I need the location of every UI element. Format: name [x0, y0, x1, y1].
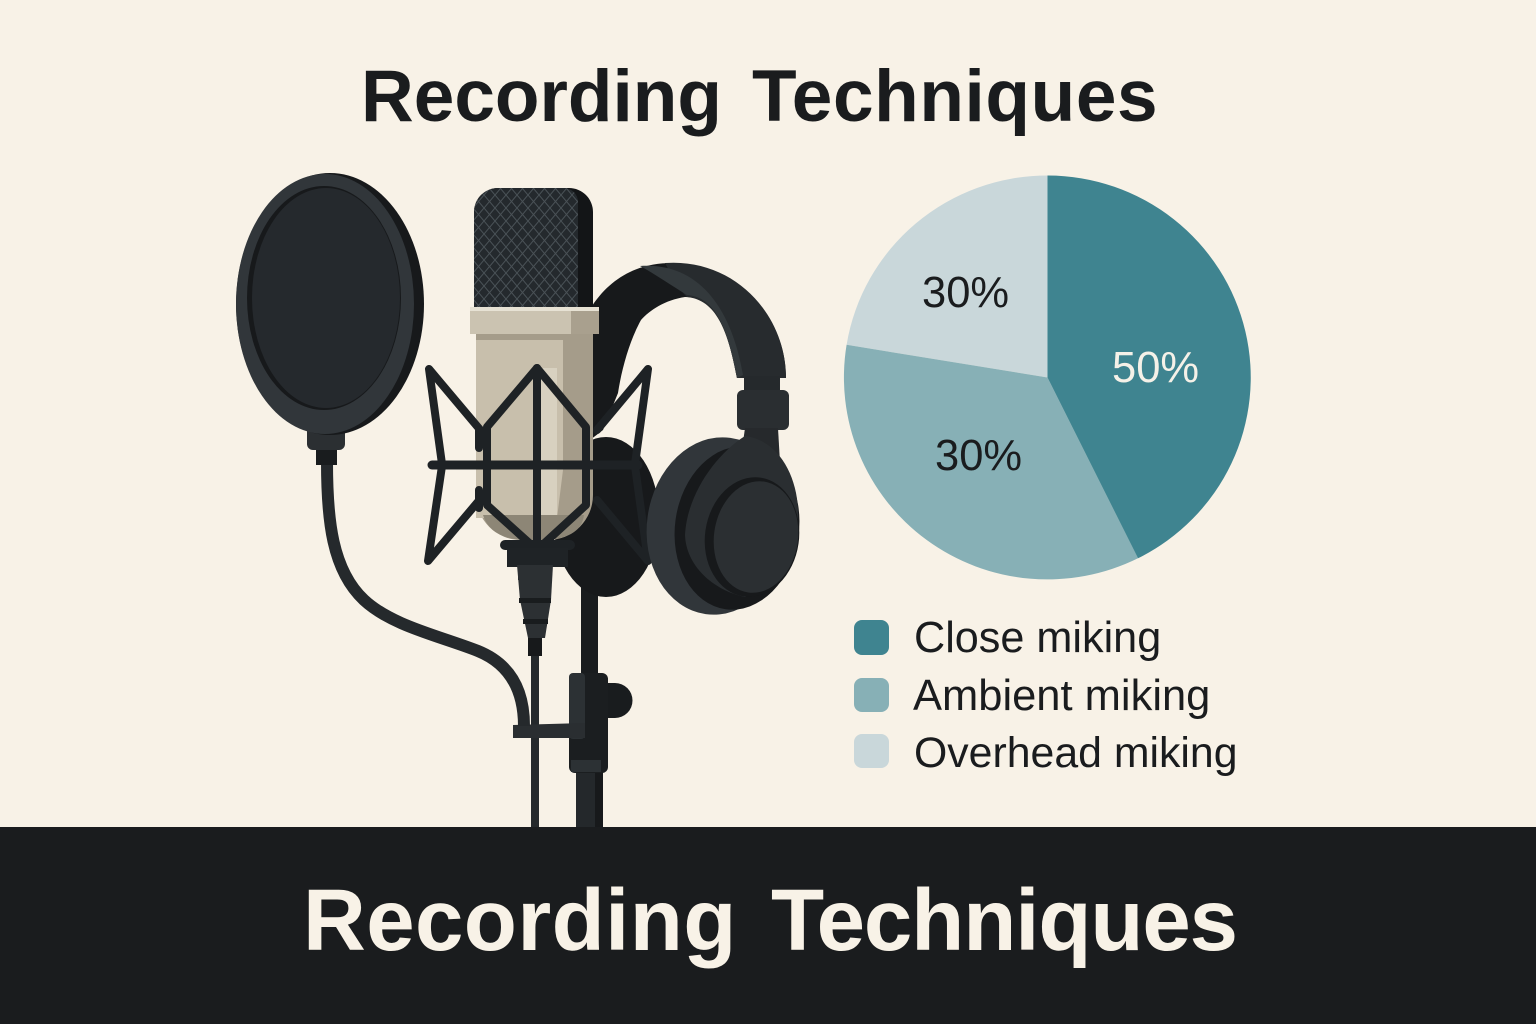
- grille: [474, 188, 593, 307]
- icon: headphone front cup: [635, 376, 810, 624]
- legend: [854, 614, 1238, 777]
- footer title: Techniques: [771, 872, 1237, 969]
- icon: mic connector: [507, 548, 568, 656]
- gooseneck cable: [327, 462, 524, 726]
- title: Recording: [361, 56, 722, 137]
- legend item: ambient miking: Ambient miking: [913, 672, 1210, 720]
- title: Techniques: [752, 56, 1158, 137]
- icon: headphone stand: [569, 585, 632, 828]
- pie chart: [844, 175, 1251, 579]
- slice: overhead miking: [847, 175, 1048, 378]
- legend item: close miking: Close miking: [914, 614, 1161, 662]
- label: 30% ambient: 30%: [935, 432, 1022, 480]
- label: 50% close: 50%: [1112, 344, 1199, 392]
- icon: headphone band and rear cup: [553, 263, 786, 597]
- collar: [470, 307, 599, 334]
- icon: microphone: [470, 188, 599, 540]
- icon: pop filter arm clamp: [513, 723, 585, 738]
- slice: close miking: [1048, 176, 1251, 558]
- footer title: Recording: [303, 872, 737, 969]
- slice: ambient miking: [844, 345, 1138, 579]
- label: 30% overhead: 30%: [922, 269, 1009, 317]
- footer band: [0, 827, 1536, 1024]
- body: [476, 334, 593, 540]
- icon: pop filter: [236, 173, 524, 726]
- icon: shock mount: [428, 368, 648, 561]
- icon: mic rod: [531, 640, 539, 828]
- legend item: overhead miking: Overhead miking: [914, 729, 1238, 777]
